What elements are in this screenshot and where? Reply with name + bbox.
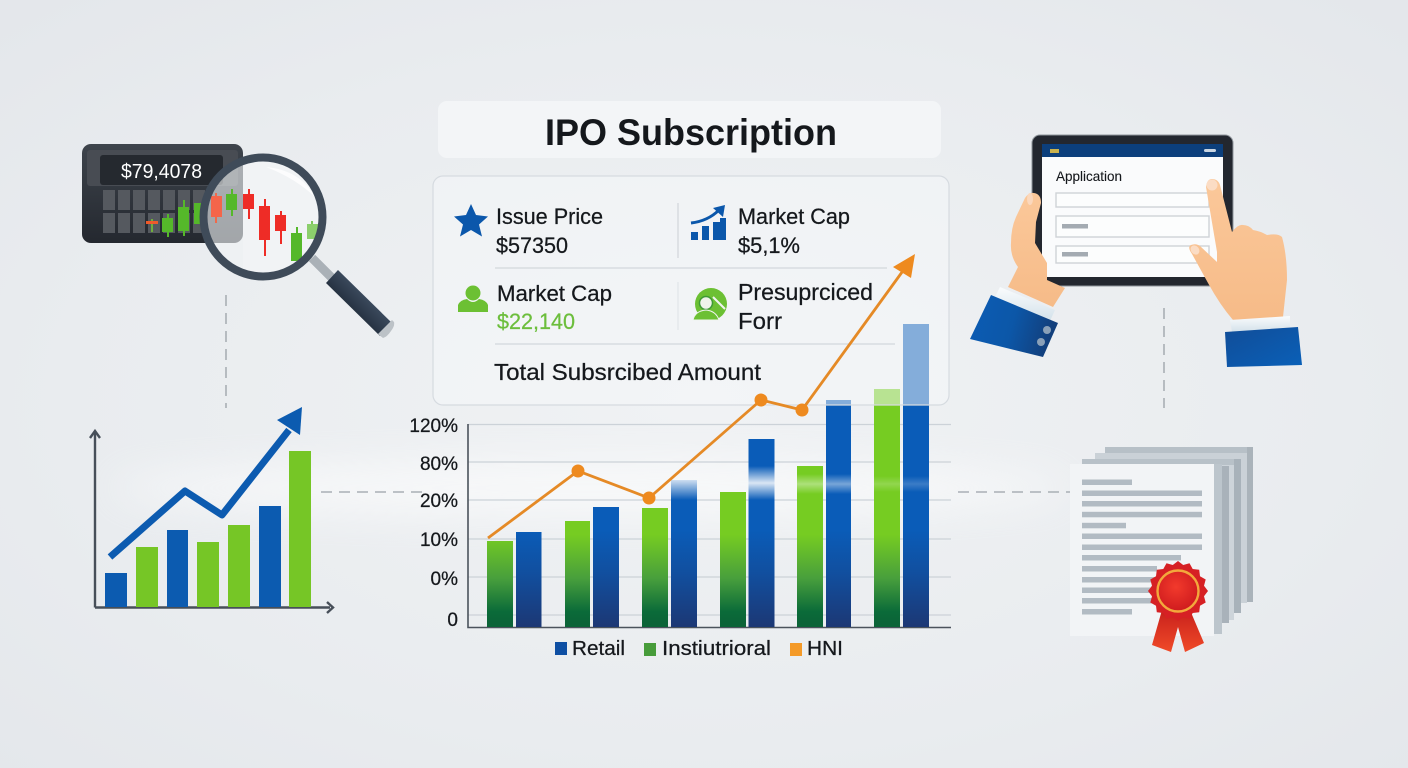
candlesticks on device: [146, 200, 201, 237]
growth arrow: [110, 407, 302, 557]
icon: rising bars: [691, 205, 726, 240]
magnifier handle: [312, 258, 394, 338]
legend: [555, 638, 843, 660]
metric: market cap percent: Market Cap: [738, 204, 850, 229]
red ribbon seal: [1148, 561, 1208, 652]
ticker device: [82, 144, 243, 243]
chart axes: [90, 431, 333, 613]
legend: HNI: [807, 638, 843, 660]
axis labels: [409, 416, 458, 631]
bars: retail: [516, 324, 929, 627]
total label: Total Subsrcibed Amount: [494, 359, 762, 385]
metric: presuprciced: Presuprciced: [738, 279, 873, 305]
metric: issue price: [496, 204, 603, 258]
panel: key metrics: [433, 176, 949, 405]
legend: Retail: [572, 638, 625, 660]
metric: issue price: $57350: [496, 233, 568, 258]
dividers: [495, 203, 895, 344]
icon: tablet with application form held by hands: [970, 135, 1302, 367]
dashed connectors: [226, 295, 1164, 492]
axis: [468, 424, 951, 628]
axis labels: 10%: [420, 530, 458, 551]
left hand and sleeve: [970, 193, 1065, 357]
title box: [438, 101, 941, 158]
metric: presuprciced: [738, 279, 873, 334]
form label: Application: [1056, 168, 1122, 184]
magnifier lens: [204, 158, 323, 276]
icon: growth bar chart with arrow: [90, 407, 333, 613]
metric: market cap value: $22,140: [497, 309, 575, 334]
tablet: [1032, 135, 1233, 286]
orange HNI trend line: [488, 254, 915, 538]
metric: issue price: Issue Price: [496, 204, 603, 229]
text lines: [1082, 480, 1202, 614]
central bar chart: [409, 324, 951, 660]
chart bars: [105, 451, 311, 607]
axis labels: 20%: [420, 491, 458, 512]
right hand and sleeve: [1189, 179, 1302, 367]
back sheets: [1082, 447, 1253, 634]
metric: market cap percent: $5,1%: [738, 233, 800, 258]
form fields: [1056, 193, 1209, 263]
axis labels: 0: [447, 610, 458, 631]
icon: person: [458, 286, 488, 312]
connector: horizontal light band: [110, 462, 1070, 514]
metric: market cap value: Market Cap: [497, 281, 612, 306]
grid lines: [468, 424, 951, 615]
icon: document stack with seal: [1070, 447, 1253, 652]
bar highlights: [671, 466, 929, 500]
title: IPO Subscription: [545, 112, 837, 153]
bars: institutional: [487, 389, 900, 627]
icon: star: [454, 204, 488, 236]
metric: market cap value: [497, 281, 612, 334]
icon: person badge: [693, 288, 727, 320]
icon: stock ticker under magnifying glass: [82, 144, 394, 338]
metric: market cap percent: [738, 204, 850, 258]
metric: presuprciced: Forr: [738, 308, 782, 334]
axis labels: 0%: [431, 569, 458, 590]
axis labels: 120%: [409, 416, 458, 437]
ticker value: $79,4078: [121, 161, 202, 183]
axis labels: 80%: [420, 454, 458, 475]
front sheet: [1070, 464, 1214, 636]
legend: Instiutrioral: [662, 638, 771, 660]
infographic canvas: [82, 101, 1302, 656]
